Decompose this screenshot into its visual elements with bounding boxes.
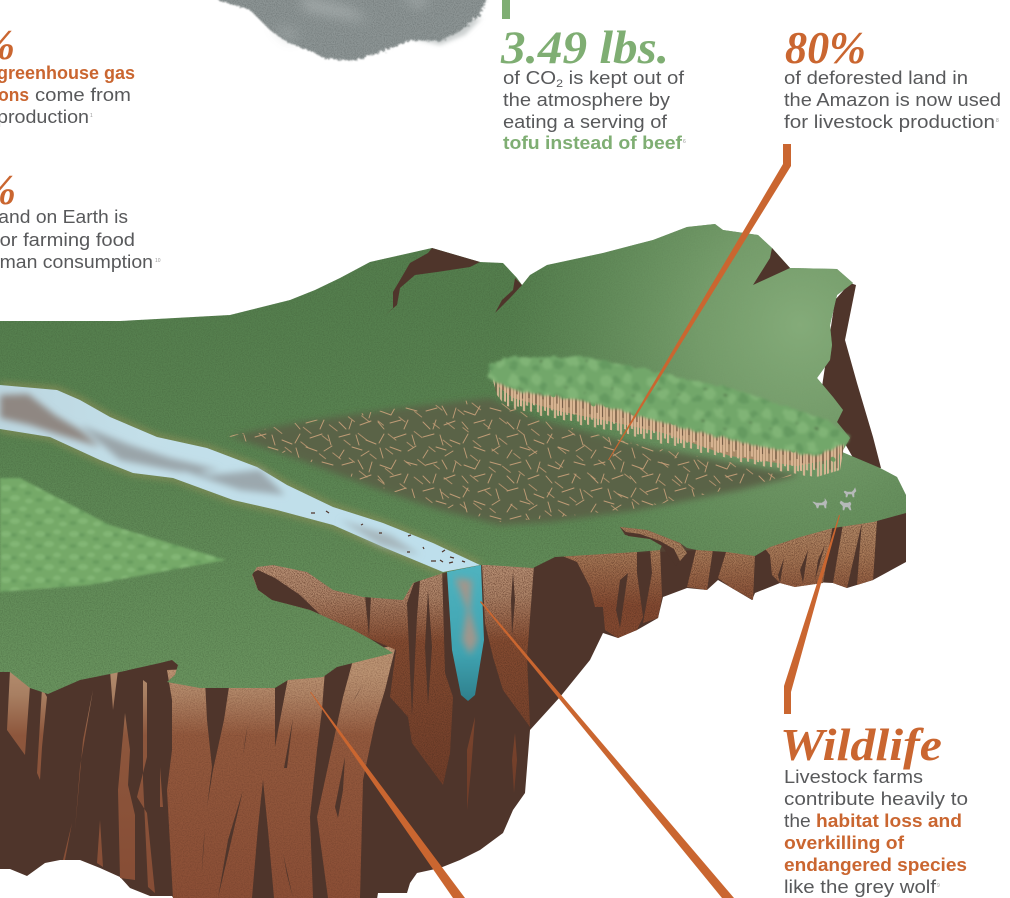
- wolf left: [813, 499, 827, 508]
- cracks: [365, 572, 515, 717]
- body line 4: overkilling of: [784, 833, 905, 853]
- sunlit land highlight: [0, 224, 906, 560]
- landmass illustration: [0, 224, 906, 898]
- trunk band backing: [493, 378, 845, 466]
- hook on right rim: [620, 527, 687, 566]
- hook underside: [620, 527, 684, 566]
- body line 6: like the grey wolf: [784, 877, 937, 897]
- footnote 9: 9: [937, 883, 940, 889]
- front rock mass: [0, 495, 906, 898]
- Amazon line: the Amazon is now used: [784, 90, 1001, 110]
- pale cloud lobe: [410, 18, 482, 45]
- cliff slivers: [7, 670, 163, 893]
- wolf right: [844, 488, 856, 497]
- body line 1: Livestock farms: [784, 767, 923, 787]
- river water: [0, 385, 480, 572]
- land folds: [385, 248, 790, 315]
- tree trunks: [490, 370, 845, 482]
- footnote 10: 10: [155, 258, 161, 264]
- livestock line: for livestock production: [784, 112, 995, 132]
- footnote 6: 6: [683, 139, 686, 145]
- leader line: waterfall: [480, 601, 734, 898]
- green land surface: [0, 224, 906, 694]
- green leader bar: [502, 0, 510, 19]
- bright green pasture: [0, 478, 226, 592]
- second layer of log debris: [228, 398, 795, 522]
- 80% headline: 80%: [785, 23, 866, 73]
- cracks: [616, 545, 825, 628]
- hook dark underside: [252, 570, 350, 628]
- serving body line: eating a serving of: [503, 112, 668, 132]
- wildlife heading: Wildlife: [780, 719, 942, 770]
- CO2 body line: 2: [556, 78, 563, 90]
- logged forest ground: [228, 398, 800, 525]
- tree canopy: [488, 357, 852, 456]
- 3.49 lbs headline: 3.49 lbs.: [500, 22, 669, 74]
- scattered log debris: [228, 398, 795, 522]
- river banks: [0, 385, 480, 572]
- leader line: cliff: [310, 692, 465, 898]
- floating logs: [311, 511, 465, 563]
- stat: land used for farming: [0, 168, 161, 272]
- stat: tofu instead of beef: [500, 22, 686, 153]
- grey wolves: [813, 488, 856, 510]
- stat: 80% deforested land: [784, 23, 1001, 132]
- river: [0, 385, 480, 572]
- hook top: [620, 527, 687, 561]
- footnote 1: 1: [90, 113, 93, 119]
- tofu highlight line: tofu instead of beef: [503, 133, 683, 153]
- wildlife text block: [780, 719, 968, 897]
- footnote 8: 8: [996, 118, 999, 124]
- right cliff panels: [555, 520, 877, 638]
- CO2 body line: is kept out of: [563, 68, 685, 88]
- cloud highlights: [272, 0, 430, 40]
- standing forest: [488, 357, 852, 482]
- cliff cracks: [202, 660, 363, 898]
- CO2 body line: of CO: [503, 68, 550, 88]
- atmosphere body line: the atmosphere by: [503, 90, 670, 110]
- body line 2: contribute heavily to: [784, 789, 968, 809]
- storm cloud: [216, 0, 490, 61]
- leader line: 80% to cleared forest: [608, 144, 791, 460]
- middle cliff panels: [252, 560, 534, 810]
- body line 5: endangered species: [784, 855, 967, 875]
- wolf middle: [840, 501, 851, 510]
- leader line: wildlife: [784, 515, 840, 714]
- deforested line: of deforested land in: [784, 68, 968, 88]
- greenhouse gas text: greenhouse gas: [0, 63, 135, 83]
- body line 3: the habitat loss and: [784, 811, 962, 831]
- left cliff panel: [7, 645, 396, 898]
- cloud body: [216, 0, 490, 61]
- come from text: come from: [35, 85, 131, 105]
- silt plume: [455, 578, 478, 655]
- smoke reflection: [0, 394, 420, 555]
- brown slivers on dark: [467, 717, 517, 810]
- rear rock face: [820, 283, 881, 470]
- waterfall: [447, 565, 484, 701]
- stat: greenhouse gas emissions: [0, 23, 135, 127]
